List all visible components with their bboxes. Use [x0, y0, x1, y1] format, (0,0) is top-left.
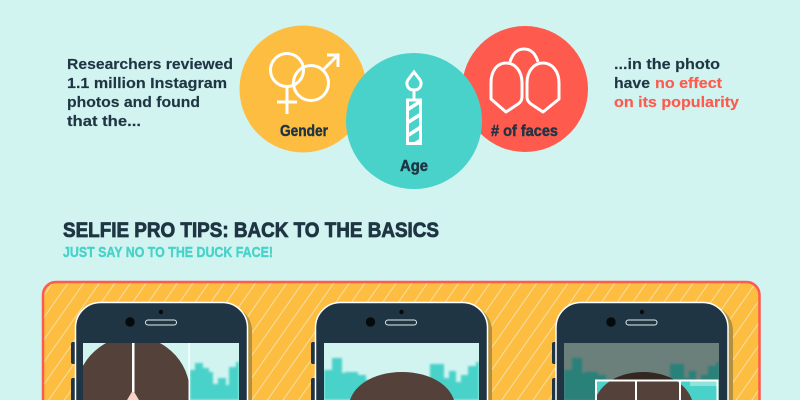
circle: number of faces — [462, 26, 588, 152]
label: gender: Gender — [280, 123, 328, 140]
dimmed screen with crop grid — [564, 343, 719, 400]
screen with centred selfie — [324, 343, 479, 400]
circle: age — [346, 53, 482, 189]
intro text: 1.1 million Instagram — [67, 75, 227, 92]
conclusion text: ...in the photo — [614, 56, 720, 73]
subheading: JUST SAY NO TO THE DUCK FACE! — [63, 245, 273, 261]
intro text — [67, 56, 233, 130]
intro text: that the... — [67, 113, 141, 130]
icon: balloons — [491, 49, 559, 112]
conclusion text: no effect — [655, 75, 722, 92]
intro text: Researchers reviewed — [67, 56, 233, 73]
phone 1 — [71, 302, 252, 400]
label: faces: # of faces — [491, 123, 558, 140]
heading: SELFIE PRO TIPS: BACK TO THE BASICS — [63, 219, 439, 242]
crop grid — [595, 380, 718, 400]
label: age: Age — [400, 158, 428, 175]
icon: candle — [405, 70, 423, 145]
intro text: photos and found — [67, 94, 200, 111]
conclusion text: on its popularity — [614, 94, 740, 111]
conclusion text — [614, 56, 740, 111]
panel: tips — [43, 282, 760, 400]
circle: gender — [240, 26, 366, 152]
screen with selfie centred on grid line — [83, 343, 239, 400]
phone 2 — [311, 302, 492, 400]
phone 3 — [552, 302, 733, 400]
conclusion text: have — [614, 75, 650, 92]
icon: gender symbols — [270, 54, 338, 114]
